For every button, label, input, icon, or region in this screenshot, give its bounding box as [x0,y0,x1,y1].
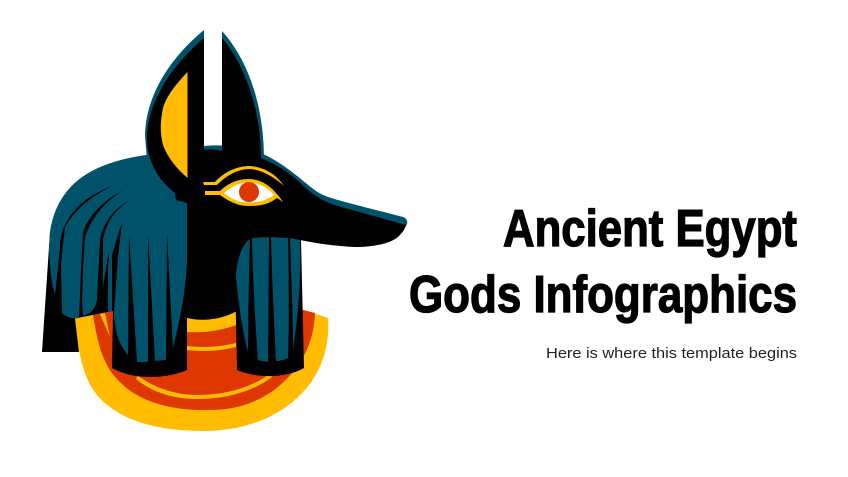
wig: right lock teal strands [236,237,300,362]
wig: left teal dome and strands [49,150,187,362]
collar: thin yellow lines [100,313,272,399]
eye: white [224,182,274,202]
head and ear: black silhouette [147,38,406,320]
title [409,200,797,324]
eye: liner [205,179,283,206]
wig: right lock black backing [235,237,304,376]
icon: Anubis head illustration [42,30,407,431]
collar: red inner band [93,310,315,410]
ear: teal outline [145,30,264,160]
collar: yellow outer band [75,310,328,431]
eye: pupil [239,182,259,202]
eye [203,166,284,206]
ear: yellow inner [161,72,188,178]
collar: yellow neck band [186,310,236,332]
title line 1: Ancient Egypt [503,200,797,258]
subtitle: Here is where this template begins [546,345,797,362]
wig: left black backing [42,170,187,377]
eye: brow [203,166,284,186]
head: teal top outline [204,145,407,240]
